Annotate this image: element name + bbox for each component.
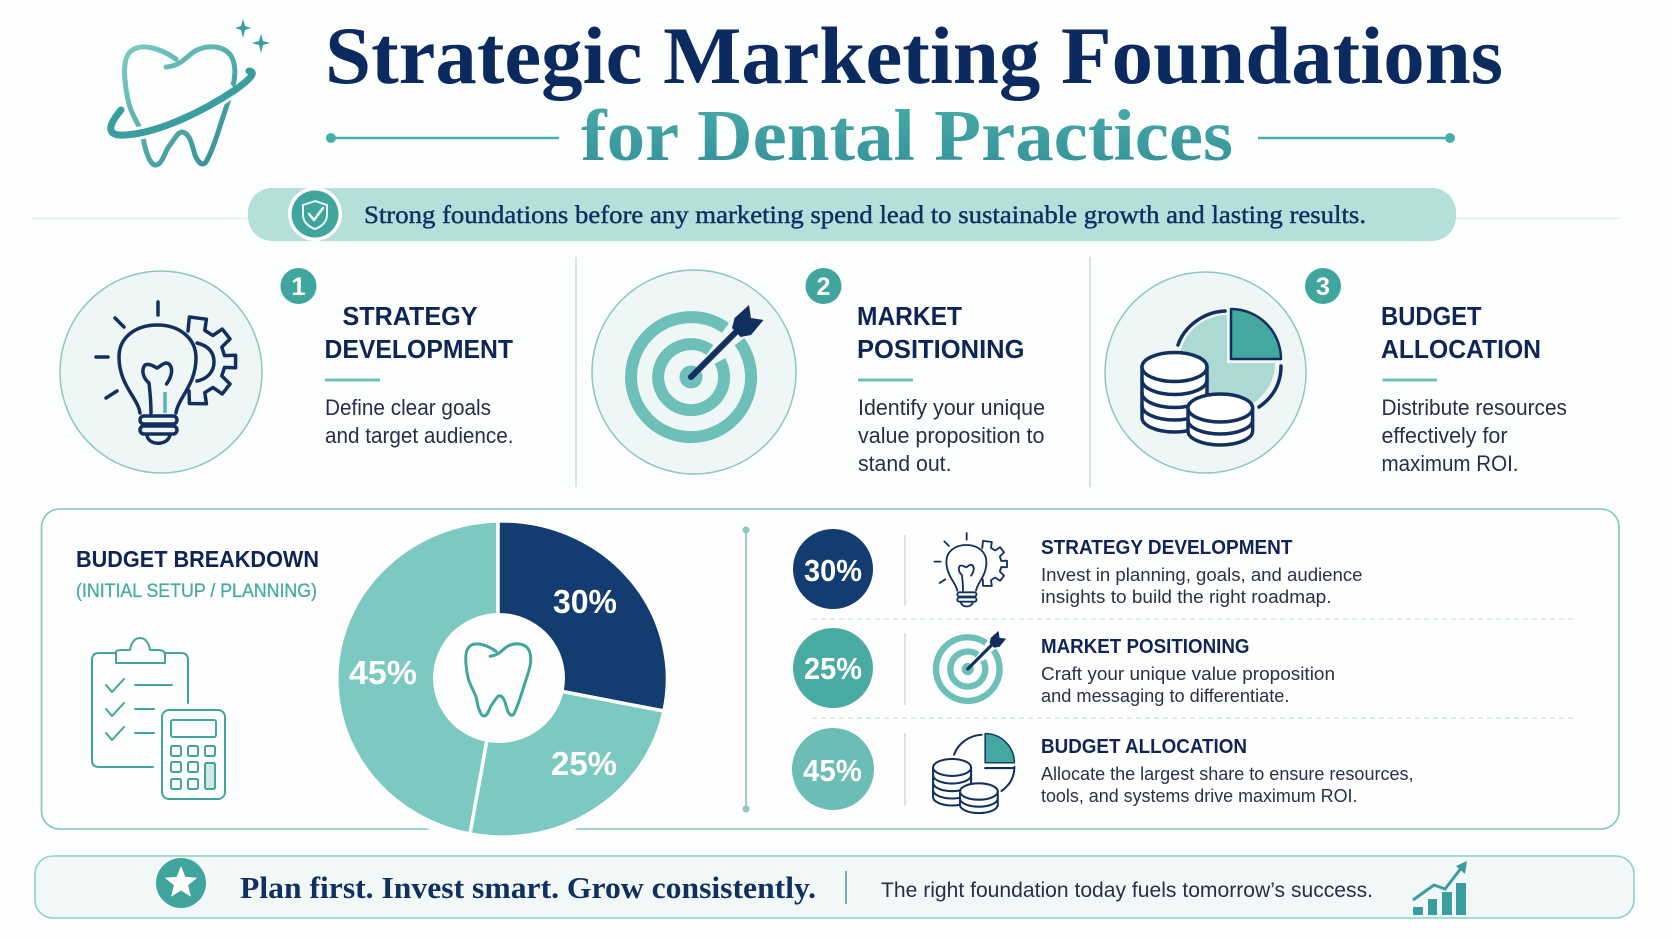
- icon: small pie and coins: [933, 734, 1014, 813]
- description: Define clear goals: [325, 395, 491, 420]
- subtitle rule right: [1258, 133, 1455, 143]
- number badge 2: [806, 268, 842, 304]
- row text: Invest in planning, goals, and audience: [1041, 565, 1362, 585]
- heading: budget breakdown: BUDGET BREAKDOWN: [76, 546, 319, 572]
- heading: BUDGET: [1381, 301, 1482, 331]
- percent badge 45: [792, 728, 874, 810]
- row text: [1041, 565, 1362, 607]
- label: 25 percent: 25%: [551, 745, 617, 782]
- label: 45 percent: 45%: [349, 654, 417, 691]
- description: [858, 395, 1045, 476]
- row: strategy development: [793, 529, 1362, 609]
- banner text: Strong foundations before any marketing spend lead to sustainable growth and lasting results.: [364, 202, 1366, 229]
- slice: 45 percent: [337, 521, 498, 834]
- row heading: MARKET POSITIONING: [1041, 636, 1250, 658]
- panel: budget allocation: [1105, 268, 1567, 476]
- heading: DEVELOPMENT: [324, 334, 513, 364]
- row text: Craft your unique value proposition: [1041, 664, 1335, 684]
- panel: strategy development: [60, 268, 514, 473]
- heading: ALLOCATION: [1381, 334, 1541, 364]
- footer tagline: The right foundation today fuels tomorrow’s success.: [881, 879, 1373, 902]
- percent badge 30: 30%: [804, 553, 862, 588]
- icon: tooth: [466, 644, 531, 716]
- percent badge 30: [793, 529, 873, 609]
- panel: budget breakdown: [42, 509, 1619, 845]
- row text: [1041, 664, 1335, 706]
- heading: [857, 301, 1024, 364]
- description: [325, 395, 514, 448]
- number badge 1: 1: [292, 273, 306, 301]
- icon: growth chart: [1413, 861, 1467, 915]
- description: value proposition to: [858, 423, 1044, 448]
- row: market positioning: [793, 628, 1335, 708]
- heading: [324, 301, 513, 364]
- number badge 3: [1305, 268, 1341, 304]
- description: Distribute resources: [1382, 395, 1567, 420]
- slice: 25 percent: [470, 679, 664, 837]
- timeline rule: [742, 526, 750, 812]
- icon: shield check: [288, 187, 342, 241]
- icon: clipboard and calculator: [92, 638, 225, 799]
- row heading: STRATEGY DEVELOPMENT: [1041, 537, 1292, 559]
- icon: small target: [936, 631, 1006, 701]
- footer banner: [35, 856, 1634, 918]
- heading: [1381, 301, 1541, 364]
- heading: STRATEGY: [342, 301, 478, 331]
- heading: MARKET: [857, 301, 962, 331]
- number badge 2: 2: [817, 273, 830, 301]
- row text: and messaging to differentiate.: [1041, 686, 1290, 706]
- panel: market positioning: [592, 268, 1045, 476]
- row: budget allocation: [792, 728, 1414, 813]
- percent badge 25: 25%: [804, 651, 862, 686]
- row text: tools, and systems drive maximum ROI.: [1041, 786, 1358, 806]
- subtitle rule left: [326, 133, 559, 143]
- number badge 1: [280, 268, 316, 304]
- banner: key message: [248, 187, 1456, 241]
- row heading: BUDGET ALLOCATION: [1041, 736, 1247, 758]
- icon: target and arrow: [592, 270, 796, 474]
- icon: light bulb and gear: [60, 271, 262, 473]
- description: stand out.: [858, 451, 952, 476]
- description: effectively for: [1382, 423, 1508, 448]
- description: [1382, 395, 1567, 476]
- slice: 30 percent: [498, 521, 667, 711]
- number badge 3: 3: [1316, 273, 1330, 301]
- sub-heading: (INITIAL SETUP / PLANNING): [76, 581, 317, 602]
- row text: insights to build the right roadmap.: [1041, 587, 1332, 607]
- label: 30 percent: 30%: [553, 583, 617, 620]
- row text: Allocate the largest share to ensure resources,: [1041, 764, 1414, 784]
- percent badge 25: [793, 628, 873, 708]
- chart: budget pie: [329, 513, 675, 845]
- icon: small bulb and gear: [934, 533, 1007, 606]
- heading: POSITIONING: [857, 334, 1024, 364]
- icon: pie chart and coins: [1105, 272, 1306, 473]
- description: maximum ROI.: [1382, 451, 1518, 476]
- row text: [1041, 764, 1414, 806]
- percent badge 45: 45%: [803, 753, 862, 788]
- description: and target audience.: [325, 423, 514, 448]
- footer slogan: Plan first. Invest smart. Grow consistently.: [240, 870, 816, 905]
- subtitle: for Dental Practices: [581, 95, 1233, 176]
- icon: star badge: [156, 858, 206, 908]
- title: Strategic Marketing Foundations: [325, 10, 1503, 101]
- description: Identify your unique: [858, 395, 1045, 420]
- logo: tooth with orbit ring and sparkles: [111, 19, 270, 165]
